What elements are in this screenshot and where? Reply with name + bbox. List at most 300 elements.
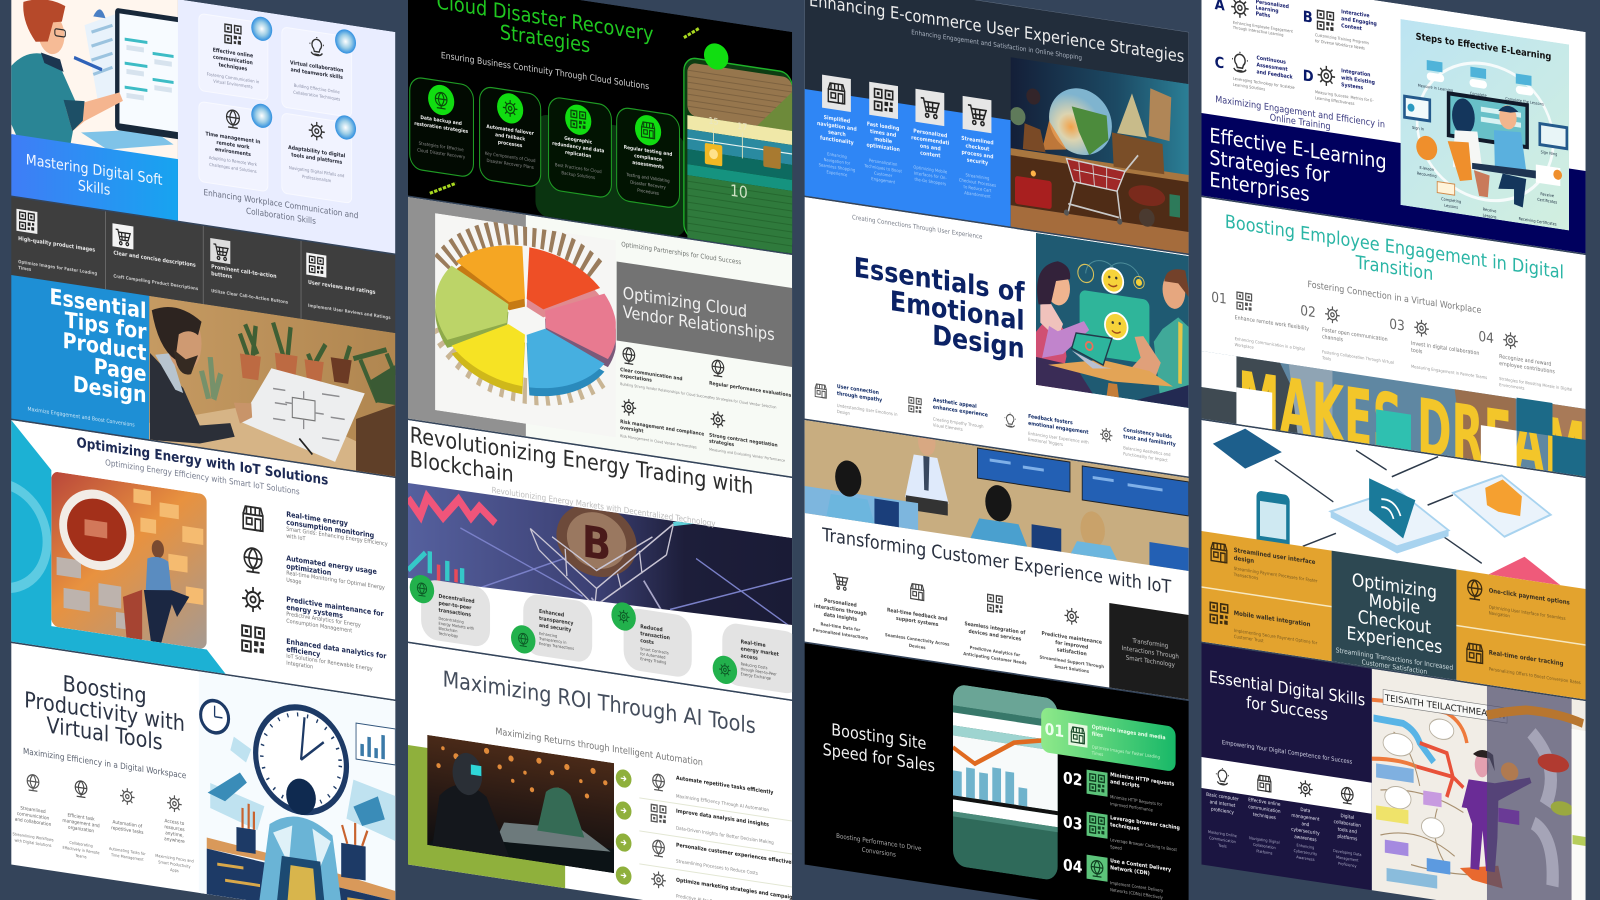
- tile: navigation: Simplified: [824, 115, 850, 125]
- step: data analysis: Data-Driven Insights for Better Decision Making: [676, 825, 774, 846]
- item: data analytics: Enhanced data analytics for: [286, 637, 387, 661]
- step 03: Speed: [1110, 844, 1122, 851]
- tile: navigation: [817, 74, 857, 179]
- item: predictive maintenance: Consumption Management: [286, 618, 352, 635]
- item: task management: management and: [62, 817, 100, 829]
- benefit: aesthetic appeal: Aesthetic appeal: [933, 397, 977, 410]
- card: lower costs: Smart Contracts: [640, 647, 669, 655]
- tile: fast loading: Fast loading: [867, 121, 900, 132]
- step 02: Fostering Collaboration Through Virtual: [1322, 349, 1394, 365]
- navy band with heading: Effective E-Learning: [1209, 123, 1387, 174]
- card: testing: Testing and Validating: [626, 172, 670, 184]
- panel: Essentials of Emotional Design: [805, 197, 1190, 477]
- illustration: clock and worker: [199, 671, 395, 900]
- item: communication: Building Strong Vendor Relationships for Cloud Success: [620, 382, 710, 400]
- block A: Learning: [1256, 5, 1279, 15]
- step: data analysis: [616, 799, 792, 854]
- tile: checkout: Streamlining: [966, 172, 990, 181]
- card: testing: [617, 107, 680, 209]
- step 02: and scripts: [1110, 779, 1140, 790]
- caption row: Management: [1336, 855, 1359, 863]
- item: maintenance: [1040, 603, 1104, 676]
- item: interactions: Real-time Data for: [820, 621, 861, 633]
- card: failover: Automated failover: [486, 124, 534, 137]
- heading: Speed for Sales: [823, 740, 935, 776]
- block C: [1215, 48, 1295, 96]
- card: online communication: [199, 7, 272, 101]
- heading: Optimizing Energy with IoT Solutions: [77, 435, 329, 489]
- tile: navigation: Seamless Shopping: [819, 162, 856, 173]
- tile: personalized: recommendati: [911, 135, 950, 147]
- step 03: Leverage Browser Caching to Boost: [1110, 837, 1177, 852]
- panel: Boosting Productivity with Virtual Tools: [11, 643, 395, 900]
- skill: data management: awareness: [1294, 834, 1317, 844]
- step: personalize: Streamlining Processes to Reduce Costs: [676, 858, 759, 877]
- step 04: 04: [1478, 329, 1494, 347]
- step 02: 02: [1063, 768, 1082, 790]
- panel: Optimizing Energy with IoT Solutions: [0, 412, 395, 700]
- step 01: highlighted card: Optimize images and media: [1092, 724, 1166, 742]
- item: risk: oversight: [620, 425, 644, 435]
- card: online communication: Fostering Communication in: [207, 71, 260, 85]
- item: predictive maintenance: Predictive maintenance for: [286, 595, 384, 618]
- title block: Product: [63, 328, 147, 366]
- item: integration: Seamless integration of: [964, 621, 1026, 637]
- step 03: techniques: [1110, 822, 1139, 833]
- block C: C: [1215, 54, 1224, 73]
- infographic image: steps to effective e-learning: Certificates: [1537, 198, 1557, 205]
- item: access anywhere: Access to: [165, 818, 185, 827]
- item: data analytics: efficiency: [286, 645, 321, 659]
- tile: fast loading: Techniques to Boost: [863, 163, 902, 174]
- card: peer-to-peer: Decentralizing: [439, 616, 464, 625]
- item: risk: Risk Management in Cloud Vendor Partnerships: [620, 434, 697, 450]
- benefit: consistency: [1100, 423, 1176, 464]
- benefit: user connection: Understanding User Emotions in: [837, 403, 898, 417]
- photo: call centre: [805, 411, 1189, 571]
- item: contracts: Strong contract negotiation: [709, 432, 778, 449]
- item: access anywhere: anytime,: [165, 830, 184, 839]
- item: access anywhere: anywhere: [164, 836, 185, 845]
- item: predictive maintenance: Predictive Analytics for Energy: [286, 611, 361, 629]
- card: peer-to-peer: transactions: [439, 607, 471, 619]
- feature: interface: [1211, 542, 1318, 590]
- step 04: Network (CDN): [1110, 865, 1150, 877]
- step 02: [1300, 302, 1394, 371]
- card: transparency: and security: [539, 623, 572, 634]
- tile: checkout: security: [967, 157, 989, 167]
- item: automation: Automating Tasks for: [109, 847, 146, 856]
- block D: Measuring Success: Metrics for E-: [1315, 90, 1374, 103]
- item: real-time monitoring: with IoT: [286, 533, 306, 543]
- item: data analytics: [241, 624, 386, 672]
- benefit: aesthetic appeal: Visual Elements: [933, 422, 963, 432]
- item: integration: Predictive Analytics for: [970, 645, 1021, 658]
- card: time management: Adapting to Remote Work: [209, 155, 258, 167]
- infographic image: steps to effective e-learning: Recounting: [1417, 171, 1437, 179]
- card: adaptability: Professionalism: [302, 174, 331, 183]
- step 01: highlighted card: files: [1092, 731, 1103, 739]
- title block: Design: [73, 371, 147, 408]
- navy band with heading: Strategies for: [1209, 145, 1330, 188]
- heading: Strategies: [500, 20, 590, 58]
- benefit: user connection: through empathy: [837, 391, 883, 404]
- card: redundancy: [549, 96, 611, 199]
- step: automate: Automate repetitive tasks efficiently: [676, 775, 774, 796]
- block B: and Engaging: [1341, 16, 1377, 28]
- card: transparency: Energy Transactions: [539, 642, 574, 651]
- card: testing: compliance: [634, 153, 662, 163]
- benefit: consistency: Functionality for Impact: [1123, 451, 1168, 463]
- photo: globe and cart on shelf: [1010, 57, 1189, 254]
- panel: Maximizing ROI Through AI Tools: [408, 643, 799, 900]
- block D: Integration: [1341, 68, 1371, 79]
- heading: Essentials of: [854, 252, 1025, 310]
- feature: call to action: [210, 238, 289, 305]
- step 04: Strategies for Boosting Morale in Digital: [1499, 376, 1572, 392]
- feature: tracking: [1467, 643, 1581, 685]
- pie chart image with people: [435, 213, 617, 437]
- infographic image: steps to effective e-learning: Lessons: [1444, 203, 1458, 210]
- item: interactions: Personalized: [824, 598, 857, 609]
- skill: communication: Effective online: [1248, 797, 1281, 808]
- benefit: user connection: Design: [837, 409, 850, 416]
- item: automated optimization: Real-time Monitoring for Optimal Energy: [286, 570, 385, 592]
- card: backup: restoration strategies: [414, 121, 468, 135]
- infographic image: steps to effective e-learning: Sign In: [1412, 126, 1425, 132]
- item: real-time monitoring: Real-time energy: [286, 510, 348, 528]
- block D: Systems: [1341, 82, 1363, 92]
- feature: descriptions: [112, 223, 199, 291]
- item: automated optimization: optimization: [286, 562, 331, 577]
- step 03: 03: [1389, 317, 1405, 335]
- block C: Leveraging Technology for Scalable: [1233, 77, 1295, 90]
- item: feedback: Devices: [909, 642, 926, 650]
- subtitle: Creating Connections Through User Experience: [852, 214, 983, 241]
- tile: checkout: Streamlined: [961, 135, 994, 147]
- item: integration: [963, 591, 1027, 666]
- heading: Blockchain: [410, 446, 514, 487]
- item: contracts: strategies: [709, 438, 734, 448]
- step 01: highlighted card: Optimize Images for Faster Loading: [1092, 744, 1160, 760]
- item: data analytics: IoT Solutions for Renewable Energy: [286, 653, 373, 673]
- feature: reviews: [306, 253, 391, 320]
- title block: [11, 275, 149, 440]
- card: transparency: transparency: [539, 616, 574, 627]
- skill: computer proficiency: Basic computer: [1206, 791, 1239, 803]
- card: transparency: Enhancing: [539, 632, 558, 639]
- timeline visual: 10: [730, 181, 748, 203]
- subtitle: Maximizing Returns through Intelligent Automation: [495, 727, 703, 769]
- illustration: man at monitor: [11, 0, 194, 163]
- card: backup: [410, 76, 473, 178]
- feature: descriptions: Craft Compelling Product Descriptions: [113, 273, 199, 291]
- cyan backdrop: [11, 420, 226, 674]
- card: redundancy: redundancy and data: [552, 141, 604, 155]
- tile: personalized: Optimizing Mobile: [913, 164, 948, 175]
- subtitle: Optimizing Energy Efficiency with Smart IoT Solutions: [105, 458, 300, 497]
- timeline visual: [684, 57, 792, 254]
- card: redundancy: Best Practices for Cloud: [555, 162, 602, 174]
- tile: navigation: Enhancing: [827, 151, 847, 159]
- item: access anywhere: Apps: [170, 868, 179, 873]
- tile: checkout: Abandonment: [964, 190, 991, 199]
- feature: tracking: Real-time order tracking: [1489, 650, 1563, 668]
- caption row: Awareness: [1296, 855, 1315, 862]
- tile: navigation: navigation and: [817, 121, 857, 133]
- panel: Boosting Site Speed for Sales: [805, 643, 1189, 900]
- step: automate: Maximizing Efficiency Through AI Automation: [676, 793, 769, 814]
- panel: Cloud Disaster Recovery Strategies: [408, 0, 792, 254]
- infographic image: steps to effective e-learning: Receive: [1483, 207, 1497, 214]
- feature: product images: High-quality product images: [18, 236, 95, 254]
- panel: Enhancing E-commerce User Experience Strategies: [805, 0, 1189, 254]
- skill: computer proficiency: and internet: [1210, 799, 1236, 809]
- benefit: feedback: Enhancing User Experience with: [1028, 431, 1089, 445]
- block A: Enhancing Employee Engagement: [1233, 21, 1293, 34]
- item: interactions: [813, 571, 868, 641]
- infographic image: steps to effective e-learning: Completing: [1441, 197, 1462, 204]
- card: virtual collaboration: Collaboration Techniques: [293, 89, 340, 102]
- item: feedback: [885, 580, 950, 654]
- card: lower costs: for Automated: [640, 652, 666, 660]
- card: market access: [713, 620, 801, 695]
- infographic image: steps to effective e-learning: Lessons: [1483, 213, 1497, 220]
- left navy panel: [1202, 643, 1372, 891]
- card: adaptability: [282, 106, 356, 204]
- mind map image: TEISAITH TEILACTHMEANTH: [1384, 692, 1505, 721]
- caption row: Developing Data: [1333, 849, 1361, 857]
- item: contracts: Measuring and Evaluating Vendor Performance: [709, 447, 785, 463]
- card: failover: Key Components of Cloud: [485, 150, 536, 163]
- tile: fast loading: Customer: [874, 170, 893, 178]
- step 02: 02: [1300, 303, 1316, 321]
- infographic image: steps to effective e-learning: Receive: [1540, 192, 1555, 198]
- benefit: feedback: emotional engagement: [1028, 421, 1089, 436]
- photo: bitcoin in cart: [408, 475, 792, 643]
- item: task management: Efficient task: [67, 812, 95, 823]
- navy band with heading: Enterprises: [1209, 167, 1310, 207]
- panel: Revolutionizing Energy Trading with Blockchain: [408, 420, 801, 701]
- card: time management: [199, 94, 272, 192]
- step 01: [1211, 288, 1309, 358]
- step 04: Implement Content Delivery: [1110, 880, 1164, 893]
- feature: call to action: buttons: [211, 271, 232, 280]
- card: adaptability: tools and platforms: [291, 152, 342, 166]
- tile: checkout: process and: [961, 149, 994, 161]
- step 03: 03: [1063, 812, 1082, 834]
- card: transparency: Transparency in: [538, 636, 567, 645]
- left navy panel: Essential Digital Skills: [1209, 667, 1365, 710]
- feature: call to action: Utilize Clear Call-to-Action Buttons: [211, 288, 289, 305]
- step 01: 01: [1211, 290, 1227, 308]
- item: maintenance: Smart Solutions: [1054, 663, 1090, 674]
- item: automated optimization: Usage: [286, 577, 301, 586]
- item: automation: Time Management: [110, 853, 144, 862]
- item: maintenance: Predictive maintenance: [1042, 631, 1103, 646]
- infographic image: steps to effective e-learning: Measure in Learning: [1418, 83, 1454, 93]
- item: task management: [62, 778, 100, 861]
- step: personalize: Personalize customer experiences effectively: [676, 842, 797, 867]
- step 02: Minimize HTTP Requests for: [1110, 794, 1163, 807]
- feature: wallet: Implementing Secure Payment Options for: [1234, 628, 1317, 646]
- card: lower costs: [611, 601, 692, 679]
- chart image: [953, 683, 1058, 881]
- infographic image: steps to effective e-learning: E-lesson: [1419, 166, 1435, 172]
- tile: personalized: the-Go Shoppers: [914, 176, 946, 186]
- heading: Maximizing ROI Through AI Tools: [443, 666, 756, 739]
- card: market access: access: [741, 653, 758, 662]
- tile: fast loading: times and: [870, 129, 897, 139]
- block B: Customizing Training Programs: [1315, 33, 1369, 45]
- card: redundancy: Geographic: [564, 135, 592, 146]
- block A: [1215, 0, 1293, 39]
- card: market access: Energy Exchange: [741, 672, 772, 681]
- navy band with heading: [1202, 113, 1586, 254]
- centre title block: Checkout: [1358, 607, 1431, 639]
- item: communication: Streamlined: [20, 805, 46, 815]
- block D: with Existing: [1341, 75, 1375, 86]
- step 03: Measuring Engagement in Remote Teams: [1411, 363, 1487, 380]
- card: market access: Real-time: [741, 639, 766, 649]
- block A: Paths: [1256, 11, 1270, 20]
- heading: Design: [932, 320, 1025, 366]
- card: testing: assessments: [632, 160, 664, 171]
- step 02: channels: [1322, 334, 1343, 344]
- panel: Effective E-Learning Strategies for Enterprises: [1202, 0, 1586, 254]
- item: performance: [709, 359, 791, 412]
- card: lower costs: transaction: [640, 631, 670, 642]
- infographic image: steps to effective e-learning: Complete the Lessons: [1505, 97, 1544, 107]
- tile: fast loading: [863, 81, 902, 186]
- item: access anywhere: resources: [164, 824, 185, 833]
- item: integration: Anticipating Customer Needs: [963, 651, 1027, 666]
- item: interactions: interactions through: [814, 603, 867, 618]
- heading: Transforming Customer Experience with IoT: [821, 525, 1172, 599]
- step 04: [1063, 851, 1172, 900]
- feature: wallet: Customer Trust: [1234, 634, 1264, 643]
- feature: tracking: Personalizing Offers to Boost Conversion Rates: [1489, 666, 1581, 685]
- skill: communication: techniques: [1253, 812, 1276, 821]
- step 04: Environments: [1499, 382, 1524, 391]
- step 01: highlighted card: 01: [1045, 719, 1064, 741]
- item: maintenance: Streamlined Support Through: [1040, 654, 1104, 669]
- benefit: consistency: trust and familiarity: [1123, 434, 1176, 448]
- feature: interface: Transactions: [1233, 571, 1258, 581]
- card: online communication: communication: [213, 54, 253, 67]
- item: automation: [109, 785, 146, 862]
- item: communication: expectations: [620, 373, 652, 384]
- block B: for Diverse Workforce Needs: [1315, 39, 1365, 51]
- squiggle decorations: [429, 27, 700, 195]
- step 02: Foster open communication: [1322, 327, 1388, 343]
- left amber panel: [1202, 531, 1332, 662]
- infographic image: steps to effective e-learning: Receiving Certificates: [1519, 217, 1557, 227]
- item: communication: and collaboration: [15, 816, 51, 828]
- card: testing: Disaster Recovery: [630, 179, 666, 190]
- title block: Maximize Engagement and Boost Conversions: [27, 406, 135, 429]
- green accent block: [408, 745, 565, 889]
- skill: data management: Data: [1300, 807, 1311, 815]
- block C: Assessment: [1256, 62, 1288, 73]
- heading: Emotional: [890, 286, 1025, 338]
- photo: robot at desk: [427, 735, 614, 873]
- panel: Mastering Digital Soft Skills: [11, 0, 395, 254]
- caption row: Proficiency: [1338, 861, 1357, 869]
- skill: collaboration tools: tools and: [1338, 826, 1357, 836]
- block D: Learning Effectiveness: [1315, 96, 1354, 106]
- item: performance: Key Strategies for Cloud Vendor Selection: [709, 395, 776, 410]
- card: virtual collaboration: and teamwork skills: [291, 67, 343, 81]
- illustration: two people and emoji: [1036, 233, 1190, 408]
- card: backup: Strategies for Effective: [419, 140, 464, 153]
- card: testing: Procedures: [637, 187, 659, 196]
- benefit: feedback: Emotional Triggers: [1028, 437, 1063, 447]
- card: testing: Regular testing and: [624, 144, 672, 158]
- centre title block: [1332, 551, 1456, 681]
- tile: fast loading: mobile: [874, 136, 893, 145]
- benefit: feedback: Feedback fosters: [1028, 414, 1073, 427]
- step 03: Leverage browser caching: [1110, 815, 1180, 832]
- card: failover: and failback: [495, 132, 526, 143]
- heading: Productivity with: [24, 687, 185, 737]
- feature: reviews: Implement User Reviews and Ratings: [308, 303, 391, 320]
- skill: collaboration tools: collaboration: [1334, 819, 1361, 829]
- tile: personalized: Personalized: [913, 128, 948, 140]
- panel: Boosting Employee Engagement in Digital Transition: [1202, 197, 1586, 498]
- card: failover: Disaster Recovery Plans: [487, 158, 534, 170]
- caption row: Platforms: [1256, 849, 1272, 856]
- step 03: [1389, 315, 1487, 380]
- card: transparency: Enhanced: [539, 609, 565, 619]
- card: failover: processes: [498, 139, 523, 149]
- block C: and Feedback: [1256, 69, 1293, 81]
- card: lower costs: costs: [640, 638, 654, 646]
- step 02: Improved Performance: [1110, 801, 1153, 813]
- item: maintenance: for improved: [1055, 640, 1089, 651]
- skill: collaboration tools: platforms: [1337, 833, 1358, 843]
- card: peer-to-peer: Technology: [438, 631, 459, 639]
- item: task management: Collaborating: [69, 841, 93, 848]
- card: peer-to-peer: peer-to-peer: [439, 600, 472, 612]
- step 01: Workplace: [1235, 342, 1254, 350]
- illustration: isometric commerce network: [1213, 423, 1560, 591]
- block B: Interactive: [1341, 9, 1370, 20]
- mind map image: [1372, 669, 1586, 900]
- item: communication: [620, 347, 710, 400]
- timeline visual: 17: [737, 120, 747, 132]
- dark callout: Interactions Through: [1122, 645, 1179, 661]
- card: time management: environments: [215, 147, 251, 158]
- tile: fast loading: Engagement: [871, 176, 895, 185]
- step 01: highlighted card: Times: [1091, 750, 1103, 757]
- card: market access: Reducing Costs: [741, 662, 767, 670]
- green marker: [704, 42, 728, 71]
- infographic image: steps to effective e-learning: Sign Ning: [1541, 150, 1558, 157]
- centre title block: Experiences: [1347, 623, 1442, 659]
- block B: [1303, 3, 1377, 53]
- panel: Transforming Customer Experience with IoT: [805, 411, 1189, 700]
- item: performance: Regular performance evaluations: [709, 380, 791, 399]
- step 03: tools: [1411, 347, 1423, 356]
- card: lower costs: Energy Trading: [640, 657, 667, 665]
- card: virtual collaboration: Virtual collaboration: [290, 60, 344, 74]
- step 01: highlighted card: [1041, 707, 1176, 772]
- benefit: user connection: [815, 380, 898, 423]
- feature: interface: Streamlined user interface: [1234, 548, 1315, 566]
- item: communication: communication: [17, 811, 49, 822]
- item: feedback: Seamless Connectivity Across: [885, 632, 950, 647]
